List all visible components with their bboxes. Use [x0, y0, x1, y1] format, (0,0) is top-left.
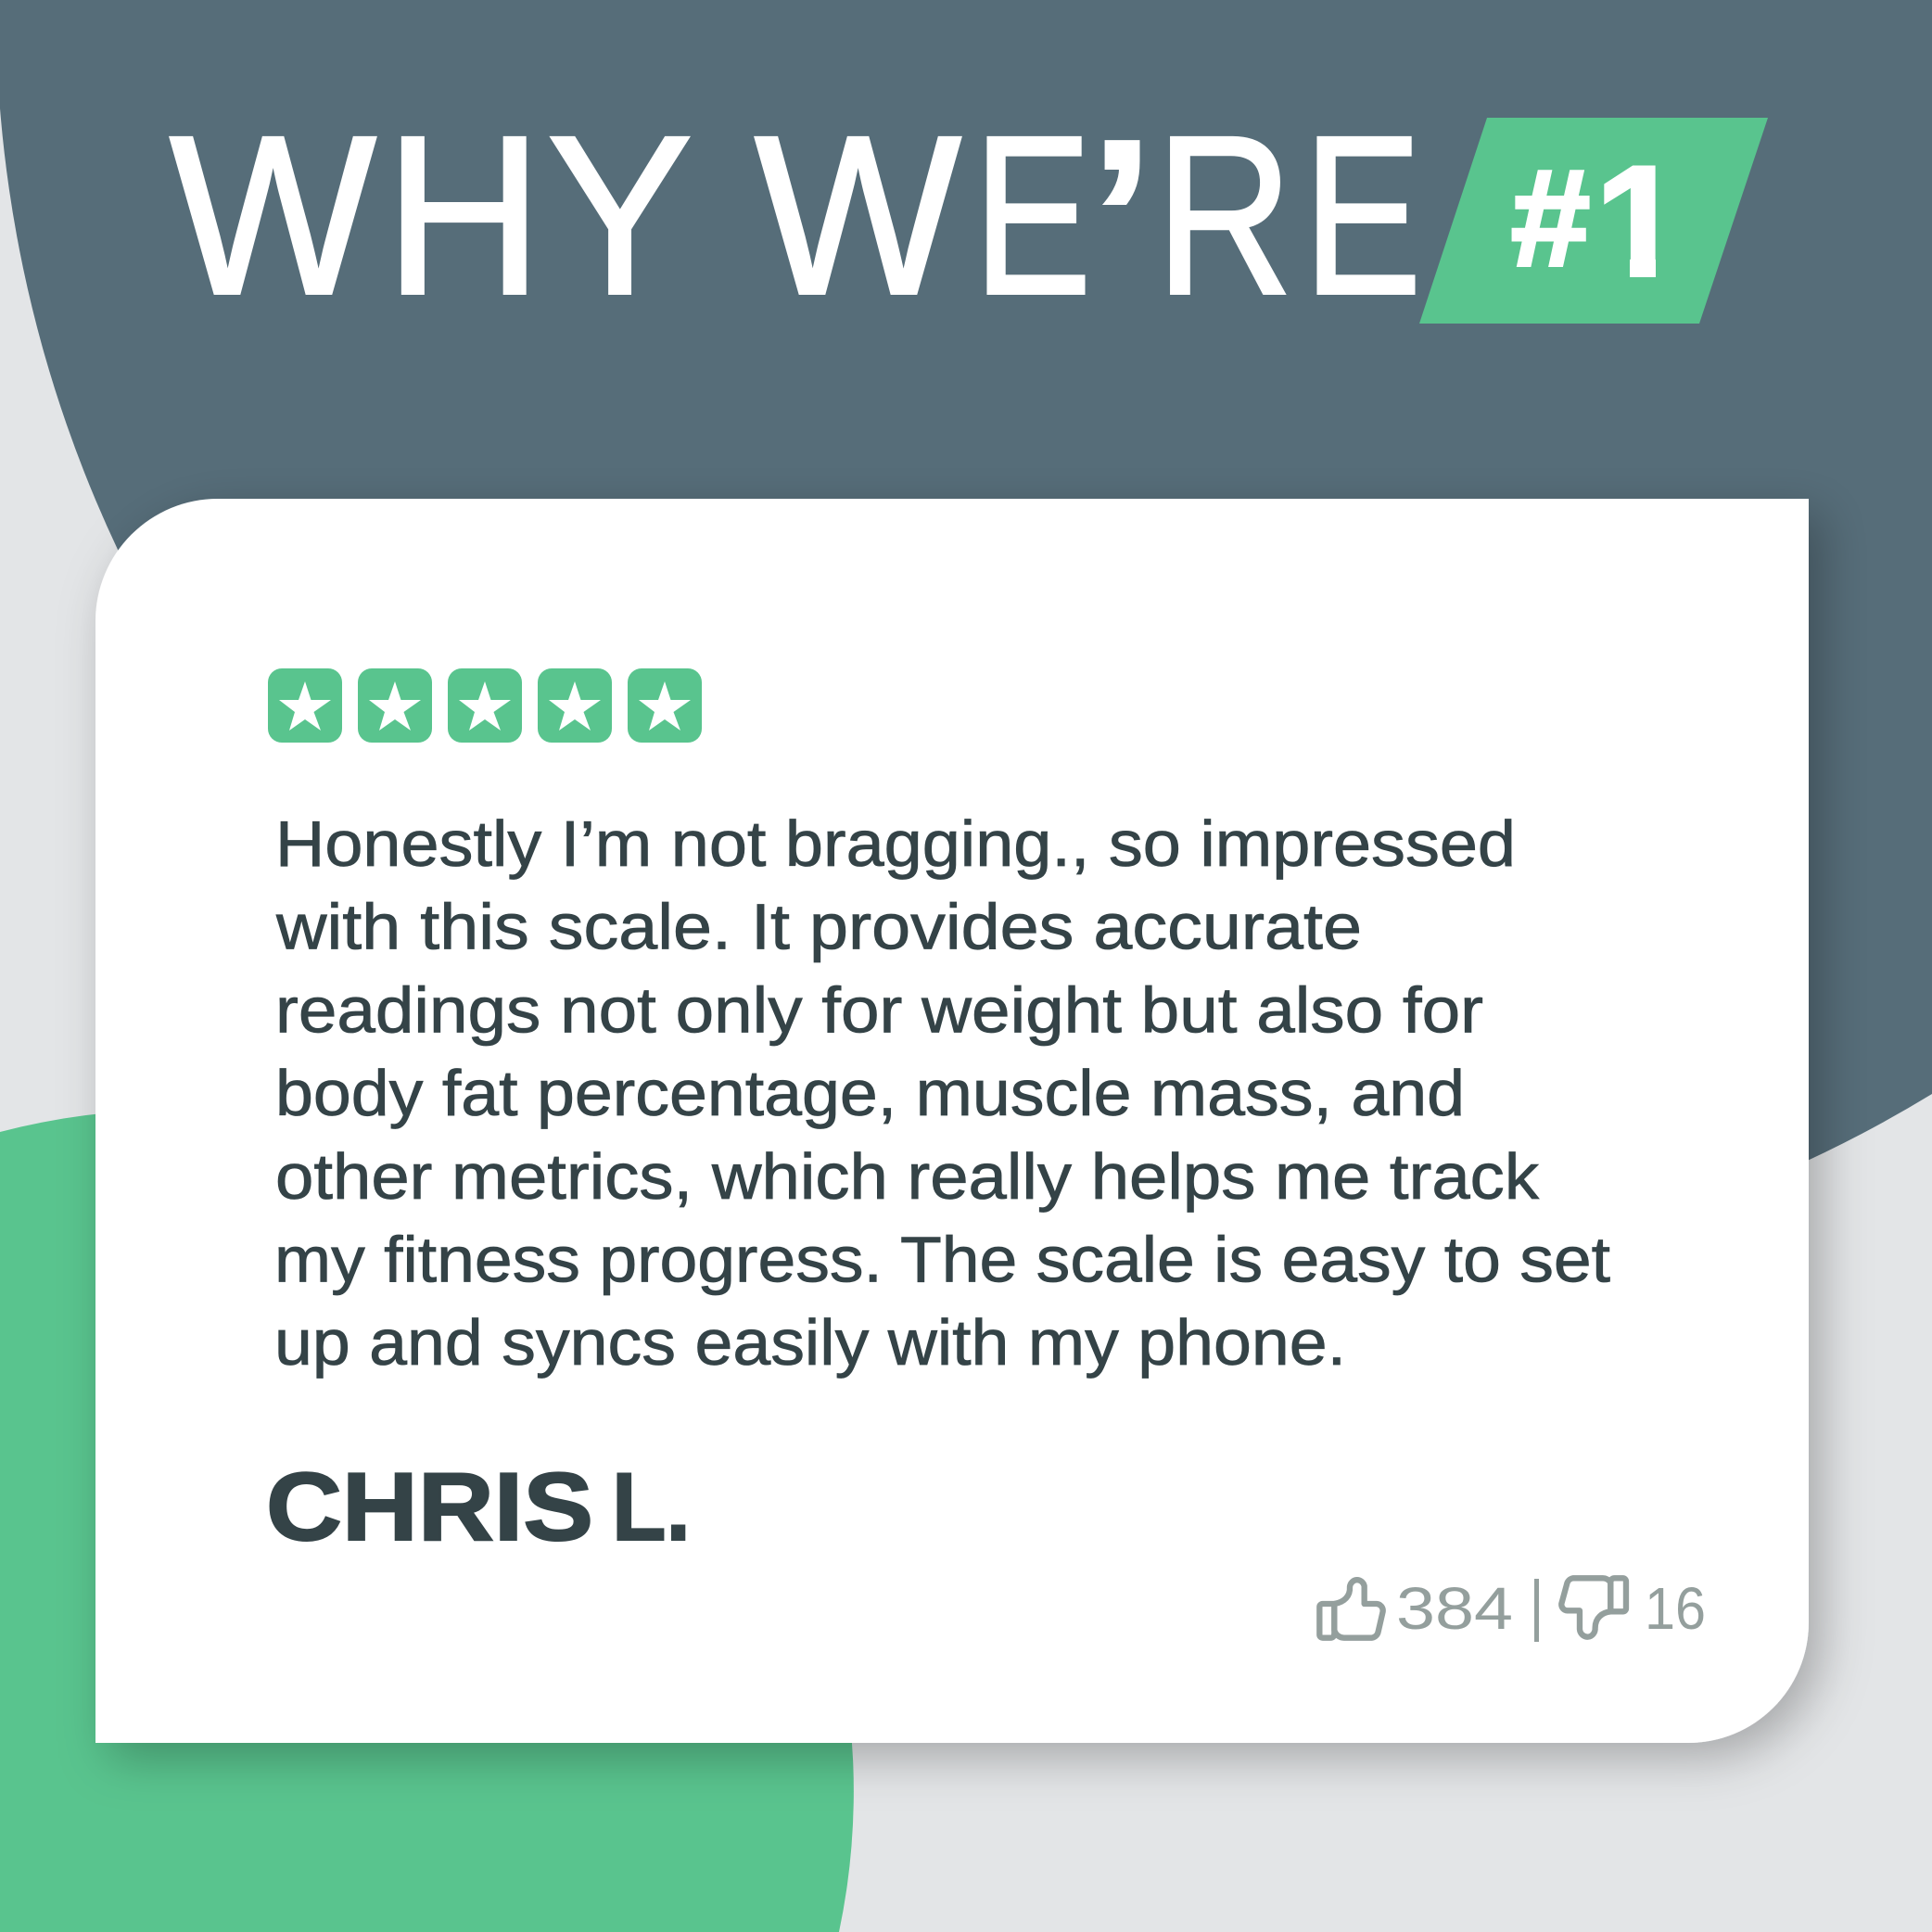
review text	[274, 807, 1610, 1379]
review text: other metrics, which really helps me track	[275, 1140, 1540, 1213]
review text: my fitness progress. The scale is easy to set	[274, 1224, 1610, 1296]
title: E	[973, 89, 1091, 342]
green background circle	[0, 1110, 854, 1932]
badge: #1: #	[1511, 142, 1590, 295]
title	[170, 81, 1421, 392]
title: R	[1155, 89, 1293, 341]
icon: thumbs up	[1319, 1580, 1383, 1638]
badge: #1: 1	[1595, 132, 1684, 311]
title: ’	[1085, 81, 1159, 392]
title: WHY	[170, 89, 693, 341]
review text: Honestly I’m not bragging., so impressed	[275, 807, 1516, 880]
title: E	[1303, 89, 1421, 342]
title: W	[755, 89, 961, 341]
review text: with this scale. It provides accurate	[275, 891, 1362, 963]
icon: thumbs down	[1561, 1578, 1626, 1637]
star 3	[448, 668, 522, 743]
panel: review card	[95, 499, 1809, 1743]
reviewer name: L.	[612, 1454, 691, 1561]
dark slate background circle	[0, 0, 1932, 1279]
badge: #1	[1419, 118, 1768, 324]
count: 16: 16	[1645, 1575, 1706, 1642]
vote counts	[1319, 1575, 1706, 1642]
count: 384: 384	[1396, 1575, 1513, 1642]
star rating	[268, 668, 702, 743]
reviewer name: CHRIS	[266, 1454, 593, 1561]
review text: readings not only for weight but also for	[275, 973, 1483, 1046]
star 2	[358, 668, 432, 743]
star 4	[538, 668, 612, 743]
review text: up and syncs easily with my phone.	[274, 1306, 1346, 1379]
star 5	[628, 668, 702, 743]
divider bar	[1534, 1579, 1539, 1642]
star 1	[268, 668, 342, 743]
review text: body fat percentage, muscle mass, and	[275, 1057, 1465, 1129]
